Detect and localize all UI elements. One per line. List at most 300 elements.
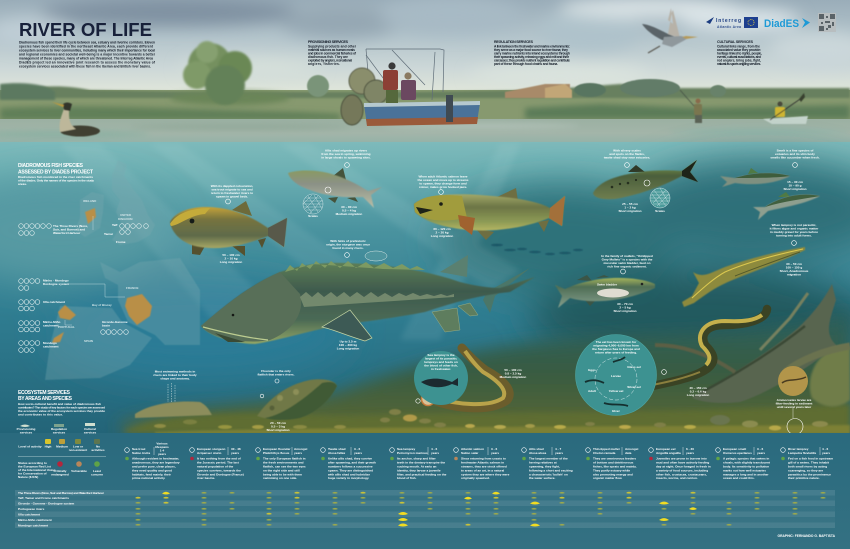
panel: parasite inset: largest of its parasitic [425,356,457,360]
species card: river lamprey: both small rivers by acting [788,464,827,468]
text: provisioning services: exploited by anglers, recreational [308,58,352,62]
map labels: PORTUGAL [58,325,75,329]
flounder label: 0.5 – 3 kg [271,424,285,428]
fish: shoal of juveniles [491,244,583,255]
species card: European smelt: marks out how well estuaries [723,468,766,472]
lamprey label: When lamprey is not parasitic, [772,223,816,227]
side scutes pattern [300,292,454,307]
legend: activity level: Medium [56,444,68,448]
sturgeon label: Up to 3.5 m [340,340,357,344]
legend: conservation status: Critically [53,469,67,473]
text: cultural services: associated value they provide: [717,48,761,52]
species card: Atlantic salmon [454,447,510,480]
twaite shad label [604,148,650,213]
legend: conservation status: for Conservation of [18,472,48,476]
species card: twaite shad: numbers follows a successive [328,464,373,468]
light rays [60,144,520,340]
fisherman right [401,72,416,100]
species card: sea trout [125,442,180,480]
scales detail: Scales [655,209,665,213]
species card: river lamprey: gill of a swims. They inhabit [788,460,829,464]
species card: sea trout: they need quality and good [132,468,172,472]
species card: twaite shad: spawn. They are distinguished [328,468,373,472]
eel label: 40 – 150 cm [689,386,707,390]
species card: European sturgeon: Gironde and Dordogne (France) [197,472,244,476]
legend: service types: services [53,430,65,434]
scales detail: Scales [308,214,318,218]
species card: Atlantic salmon: originally spawned. [461,476,490,480]
heading: Diadromous fish monitored in the river catchments [18,175,93,179]
species card: allis shad: a characteristic 'bulleh' on [529,472,568,476]
heading: ASSESSED BY DIADES PROJECT [18,170,93,176]
legend: service types: Cultural [84,427,96,431]
species card: European flounder: being able to be with them [263,472,302,476]
species card: twaite shad: 3 - 6 [354,447,360,451]
mullet label [601,254,653,313]
map labels: Waterford Harbour [53,231,81,235]
intro text: management of these species, many of which are threatened. The Interreg Atlantic Area [19,56,153,60]
smelt label: smells like cucumber when fresh. [770,156,820,160]
species card: allis shad: spawning, they fight, [529,464,560,468]
species card: allis shad: years [555,451,563,455]
river surface [0,119,850,143]
QR code [818,13,836,32]
fish: European flounder on rock [257,379,337,420]
species card: sea lamprey: Sea lamprey [397,447,416,451]
illustration: distant bush and farm buildings [307,75,726,98]
intro text: DiadES project led an innovative joint research to assess the monetary value of [19,60,156,64]
intro text: species have been identified in the northeast Atlantic Area, each provide different [19,44,154,48]
species card: European eel: day at night. Once foraged in fresh in [656,464,711,468]
legend: conservation status: concern [91,472,103,476]
text: cultural services: Cultural links range, from the [717,44,760,48]
lamprey label: it filters algae and organic matter [770,226,819,230]
panel: eel life cycle: Glass eel [627,365,641,369]
heading: ecosystem services: the economic value of the ecosystem services they provide [18,409,105,413]
species card: European sturgeon: river basins. [197,476,215,480]
species card: river lamprey: their primitive nature. [788,476,820,480]
species card: European flounder: the fresh environments and [263,460,304,464]
map labels: Taff [112,223,118,227]
map labels: Minho - Mondego [43,278,69,282]
flounder label [258,369,295,432]
legend: service types: Regulation [51,427,67,431]
legend: service types: services [20,430,32,434]
salmon label: When adult Atlantic salmon leave [418,174,468,178]
species card: thin-lipped mullet: Amongst [625,447,638,451]
illustration: cormorant [52,102,100,136]
heading: DIADROMOUS FISH SPECIES [18,163,84,169]
sturgeon fins [440,255,468,277]
credit: GRAPHIC: FERNANDO G. BAPTISTA [778,534,836,538]
shad label: 30 – 80 cm [341,205,357,209]
species card: Atlantic salmon: to areas of an art, in a natural [461,468,504,472]
species card: Atlantic salmon: years [491,451,499,455]
species card: European flounder: flatfish, can see the two eyes [263,464,306,468]
species card: thin-lipped mullet: fishes, like sprats and mainly. [593,464,637,468]
species card: European sturgeon: the Jurassic period. The last [197,460,239,464]
species card: Atlantic salmon: Since returning from coasts to [461,456,506,460]
map labels [43,199,138,348]
species card: European smelt: manages a long and in another [723,472,769,476]
fish: thin-lipped mullet: Swim bladder [597,282,618,286]
intro text [19,40,156,68]
scutes [285,261,425,272]
species card: European flounder: Amongst [294,447,307,451]
legend: conservation status: endangered [51,472,69,476]
species card: allis shad: the water surface. [529,476,555,480]
legend: activity level: Level of activity [18,444,42,448]
species card: European eel [649,447,711,480]
species card: river lamprey [781,447,833,480]
species card: European eel: Anguilla anguilla [656,451,681,455]
species card: twaite shad: huge variety in morphology. [328,476,369,480]
legend: conservation status: Status according to [18,461,47,465]
smelt label: 15 – 30 cm [787,180,803,184]
species card: European flounder: on the right side and still [263,468,300,472]
panel: lamprey larva inset [776,366,812,434]
flounder label: flatfish that enters rivers. [258,372,295,376]
sturgeon label: found in many rivers. [332,246,364,250]
species card: allis shad: 4 - 7 [555,447,561,451]
species card: European flounder [256,447,307,480]
species card: sea lamprey: teeth in the dentary transpire the [397,460,445,464]
species card: European sturgeon: Acipenser sturio [197,451,222,455]
illustration: angler [680,90,702,123]
right-side bank [810,348,850,406]
text: cultural services [717,40,762,66]
species card: thin-lipped mullet: Chelon ramada [593,451,616,455]
text: regulation services [494,40,570,66]
species card: European smelt: shoals, with slightly translucent [723,460,770,464]
panel: parasite inset [414,351,468,405]
trout label: return to freshwater rivers to [211,191,253,195]
species card: European eel: European eel [656,447,676,451]
twaite shad label: 25 – 55 cm [622,202,638,206]
legend: conservation status [18,461,103,479]
species card: river lamprey: parasitics by the prominence [788,472,831,476]
species card: European flounder: years [294,451,302,455]
species card: sea lamprey: Petromyzon marinus [397,451,428,455]
text: swimming note: rivers are linked to their body [153,373,197,377]
text: regulation services: REGULATION SERVICES [494,40,534,44]
legend: activity level: Low or [73,444,84,448]
species card: thin-lipped mullet [586,447,638,480]
species card: allis shad: Allis shad [529,447,544,451]
text: provisioning services: diadromous fish. They are [308,55,348,59]
heading: of the diades. Only the names of the species in the study [18,178,94,182]
salmon label: 2 – 20 kg [435,230,449,234]
pebbles [154,409,828,430]
shad label: from the sea in spring, swimming [321,152,371,156]
row labels: Ulla catchment [18,512,40,516]
sturgeon label [326,239,370,350]
row labels: Minho-Miño catchment [18,518,52,522]
legend: activity level: activities [91,448,105,452]
markers: high activity [162,492,697,526]
species card: Atlantic salmon: Atlantic salmon [461,447,484,451]
illustration: heron [642,8,698,53]
sturgeon label: Long migration [337,346,359,350]
species card: river lamprey: Fed on a fish food in upstream [788,456,833,460]
species card: allis shad: following a short and exciting [529,468,573,472]
heading [18,163,94,186]
species card: sea trout: and prefer pure, clean places, [132,464,176,468]
flounder label: 20 – 50 cm [270,421,286,425]
salmon label: 60 – 120 cm [433,227,451,231]
fish: European eel [648,309,767,397]
text: swimming note: shape and anatomy. [160,376,190,380]
species card: European smelt: European smelt [723,447,746,451]
text: provisioning services: anglers, fisheries. [308,62,340,66]
logo: Interreg Atlantic Area [706,17,758,29]
logo: DiadES: DiadES [764,18,799,30]
flounder label: Short migration [266,428,290,432]
trout label: With its dappled colouration, [211,184,253,188]
eel label: Long migration [687,393,709,397]
species card: sea trout: 1-4 [160,448,165,452]
panel: bottom band [0,433,850,549]
map labels: Suir, and Barrow) and [53,228,85,232]
illustration: mound with bubbles [135,383,212,418]
map labels: Minho-Miño [43,320,60,324]
species card: European smelt: Osmerus eperlanus [723,451,752,455]
species card: twaite shad [321,447,376,480]
species card: European eel: years [686,451,694,455]
species card: sea lamprey: sucking mouth. At early an [397,464,437,468]
map labels: SPAIN [84,339,93,343]
species card: European sturgeon: European sturgeon [197,447,225,451]
fish: European smelt pair [720,148,820,220]
markers: low activity [135,492,826,526]
smelt label: Short migration [783,187,807,191]
lamprey label [770,223,819,276]
twaite shad label: 1 – 2 kg [624,206,636,210]
panel: eel life cycle: migrating 4,000–6,000 km from [593,344,639,348]
species card: European sturgeon: natural population of the [197,464,234,468]
text: provisioning services: PROVISIONING SERVICES [308,40,349,44]
salmon label [418,174,469,238]
panel: eel life cycle: Adult [588,389,596,393]
title: RIVER OF LIFE [19,19,152,40]
map labels: Ulla catchment [43,300,65,304]
species card: European eel: other fish, crustacea, crustaceans, [656,472,707,476]
sea lamprey label: 0.8 – 2.5 kg [505,372,521,376]
species card: sea lamprey: identity, they larvae a juvenile [397,468,441,472]
lamprey label: 30 – 50 cm [786,262,802,266]
trout label: 2 – 10 kg [224,256,238,260]
text: regulation services: they serve as a major food source to river fauna; they [494,48,568,52]
species card: river lamprey: years [822,451,830,455]
row labels [18,491,105,528]
logo: Interreg Atlantic Area: Interreg [716,18,741,24]
legend: activity level: non-existent [69,448,87,452]
row labels: Taff, Tamar and Frome catchments [18,496,69,500]
panel: eel life cycle [576,334,656,416]
species card: sea trout: Sea trout [132,447,145,451]
panel: parasite inset: lampreys and feeds on [424,360,458,364]
illustration: fishing boat with net [341,49,480,126]
species card: twaite shad: Alosa fallax [328,451,345,455]
species card: sea lamprey: years [431,451,439,455]
species card: allis shad: herring relatives at [529,460,557,464]
mullet label: Short migration [613,309,637,313]
species card: sea trout: years [158,452,166,456]
map labels: catchment [43,344,58,348]
panel: eel life cycle: return after years of feeding. [595,350,637,354]
heading: ecosystem services: contributes? The study of key factors for each species we assessed [18,406,105,410]
scute detail [365,251,387,261]
species card: thin-lipped mullet: organic matter flow. [593,476,622,480]
species card: European smelt: 3 - 6 [757,447,763,451]
text: cultural services: events, cultural associations, and [717,55,761,59]
fisherman left [383,62,398,103]
species card: European eel: 6 - 30 [686,447,694,451]
map labels: IRELAND [83,199,97,203]
fish: river lamprey [682,223,819,307]
species card: European eel: mud and often have actively feeding [656,460,709,464]
panel: eel life cycle: the Sargasso Sea to Europe and [592,347,640,351]
fish: twaite shad [593,148,698,213]
mullet label: 2 – 5 kg [619,306,631,310]
map: western Europe [18,160,200,380]
map labels: KINGDOM [118,217,133,221]
heading: ecosystem services: BY AREAS AND SPECIES [18,396,73,402]
text: provisioning services: material sources as human meals [308,48,355,52]
sea lamprey label: Medium migration [500,375,526,379]
species card: European sturgeon: 30 - 48 [231,447,241,451]
fish: sea lamprey [414,348,526,408]
panel: lamprey larva inset: filter-feeding in sediment [776,402,812,406]
landscape: far bank and meadows [0,83,850,122]
text: provisioning services: and jobs in commercial fisheries of [308,52,357,56]
sturgeon label: 100 – 300 kg [339,343,357,347]
trout label: Long migration [220,260,242,264]
species card: sea trout: anadromous, they are legendary [132,460,180,464]
mullet label: muscular swim bladder, feed on [604,261,651,265]
fish: Atlantic salmon [414,174,565,240]
map labels: catchment [43,324,58,328]
species card: European eel: Juveniles are prone to burrow into [656,456,707,460]
trout label [211,184,253,264]
species card: sea trout: Although resident in freshwater, [132,456,179,460]
species card: European eel: a variety of food sources, including [656,468,708,472]
text: regulation services: carcasses; they provide nutrient regulation and contribute [494,58,570,62]
map labels: Mondego [43,341,57,345]
outboard motor [446,95,453,122]
riverbed [120,310,850,434]
map labels: FRANCE [126,286,138,290]
panel: eel life cycle: The eel has been known for [596,340,637,344]
flounder label: Flounder is the only [261,369,291,373]
text: swimming note: Most swimming methods in [155,370,195,374]
lamprey label: in muddy gravel for years before [770,230,818,234]
salmon label: Long migration [431,234,453,238]
text: cultural services: CULTURAL SERVICES [717,40,754,44]
species card: sea lamprey: Its anchor, sharp and filter [397,456,436,460]
species card: sea lamprey [390,447,447,480]
species card: European eel: insects, worms, and carrion. [656,476,698,480]
net frame [366,49,444,100]
twaite shad label: twaite shad stay near estuaries. [604,156,650,160]
species card: thin-lipped mullet: data [625,451,632,455]
map labels: Dordogne system [43,282,69,286]
species card: European flounder: The only European flatfish in [263,456,306,460]
species card: sea trout: Salmo trutta [132,451,150,455]
map labels: Frome [116,240,126,244]
lamprey label: Short, Anadromous [780,269,809,273]
mullet label: 30 – 70 cm [617,302,633,306]
species card: thin-lipped mullet: They are omnivorous feeders [593,456,636,460]
species card: European flounder: Platichthys flesus [263,451,290,455]
salmon label: to spawn, they change form and [419,182,467,186]
smelt label: Smelt is a fine species of [777,148,814,152]
illustration: kayaker [763,93,808,124]
text: provisioning services [308,40,357,66]
twaite shad label: With silvery scales [613,148,641,152]
land masses [45,160,200,380]
mullet label: Grey Mullets" is a species with the [602,258,653,262]
text: regulation services: carry marine nutrients into inland ecosystems through [494,52,570,56]
species card: European sturgeon [190,447,244,480]
species card: sea trout: habitats, feed mainly, their [132,472,172,476]
row bands [15,490,835,528]
hull [364,103,480,125]
intro text: ecosystem services to river communities, including many which their importance for local [19,48,155,52]
row labels: Gironde - Garonne - Dordogne system [18,502,74,506]
salmon label: colour, males grow hooked jaws. [419,185,467,189]
species card: European sturgeon: years [231,451,239,455]
map labels: Gironde-Garonne [102,320,128,324]
species card: river lamprey: 4 - 6 [822,447,828,451]
species card: allis shad: The largest member of the [529,456,568,460]
shad label: in large shoals to spawning sites. [321,156,371,160]
panel: parasite inset: the blood of other fish, [424,364,458,368]
species card: twaite shad: Unlike allis shad, they survive [328,456,372,460]
species card: sea trout: prime national activity. [132,476,165,480]
species card: thin-lipped mullet: also promoting energy and [593,472,633,476]
sturgeon body [201,263,535,344]
lamprey label: turning into adult forms. [776,234,812,238]
panel: eel life cycle: Yellow eel [609,389,624,393]
heading: areas. [18,182,27,186]
logo: Interreg Atlantic Area: Atlantic Area [717,25,741,29]
species card: European smelt [716,447,770,480]
species card: twaite shad: Twaite shad [328,447,346,451]
intro text: and regional economies and societal well-being is a major incentive towards a better [19,52,156,56]
fish: thin-lipped mullet [555,254,655,313]
fish: allis shad [288,148,382,218]
heading: ecosystem services [18,390,105,416]
species card: Atlantic salmon: freshwater Atlantic salmon in [461,460,504,464]
highlighted river basins [52,208,152,343]
map labels: UNITED [120,213,132,217]
sturgeon label: With hints of prehistoric [330,239,366,243]
sea lamprey label: 50 – 100 cm [504,368,522,372]
species card: European sturgeon: It has nothing from the end of [197,456,242,460]
fish: sea trout [170,184,287,264]
heading: ecosystem services: ECOSYSTEM SERVICES [18,390,71,396]
row labels: Mondego catchment [18,524,48,528]
heading: ecosystem services: and contributes to this value. [18,412,63,416]
species card: sea lamprey: blood of fish. [397,476,417,480]
illustration: sunken log and roots [655,284,850,403]
background: sky [0,0,850,92]
smelt label: 10 – 90 g [788,184,802,188]
heading: ecosystem services: How socio-cultural benefit and value of diadromous fish [18,402,101,406]
legend: activity level: No [96,444,100,448]
shad label: Allis shad migrates up rivers [325,148,367,152]
